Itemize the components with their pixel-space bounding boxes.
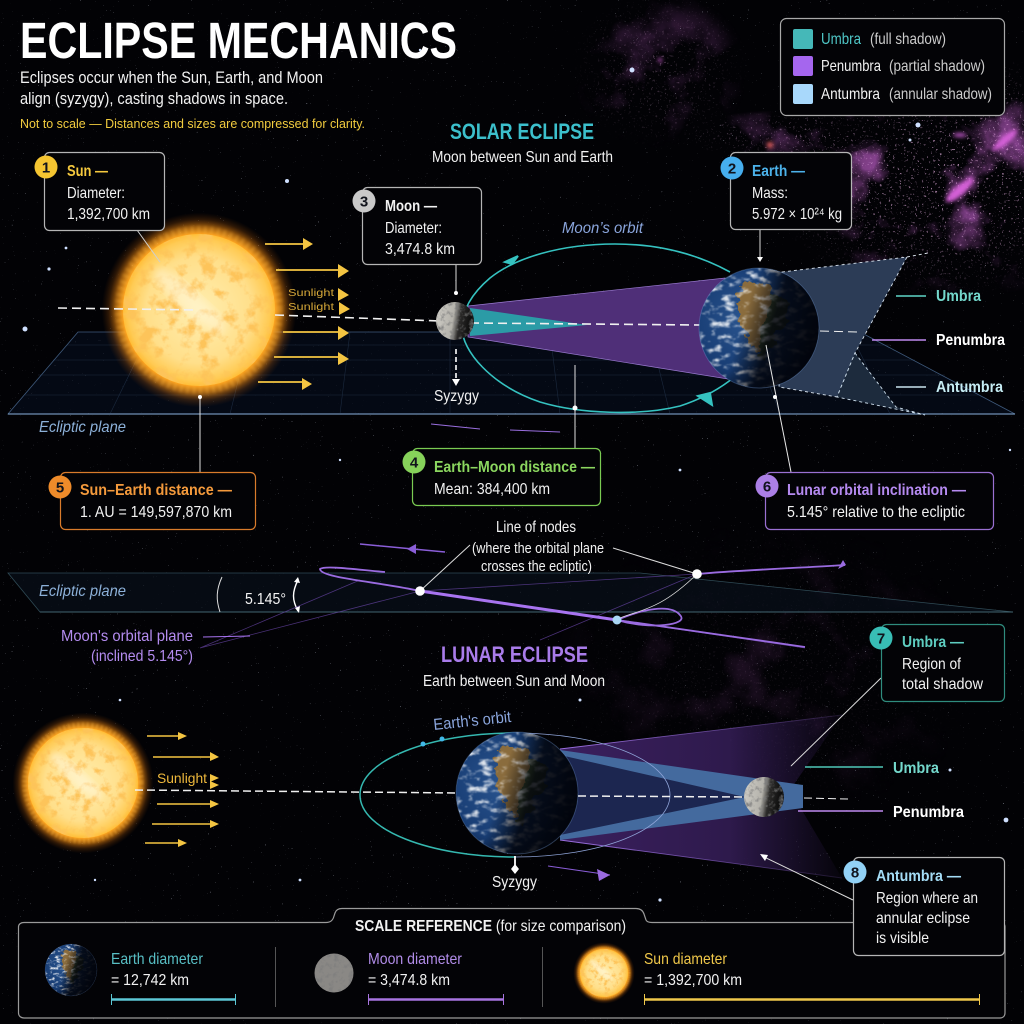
callout 1: sun: Diameter:	[67, 185, 125, 202]
callout 5: sun-earth distance: Sun–Earth distance —	[80, 482, 232, 499]
penumbra cone, solar diagram	[468, 278, 740, 381]
legend: Umbra	[821, 31, 861, 48]
callout 1: sun	[34, 152, 164, 262]
scale reference panel: = 12,742 km	[111, 972, 189, 989]
sunlight arrows, solar diagram: Sunlight	[288, 288, 334, 299]
callout 3: moon: 3,474.8 km	[385, 241, 455, 258]
ecliptic plane grid, solar diagram	[8, 332, 1015, 414]
syzygy marker, lunar diagram: Syzygy	[492, 874, 537, 891]
callout 8: antumbra: is visible	[876, 930, 929, 947]
callout 3: moon	[352, 188, 482, 295]
earth, solar diagram	[699, 268, 819, 388]
callout 2: earth: 2	[728, 160, 736, 178]
earth's orbit: Earth's orbit	[433, 709, 512, 734]
legend: (partial shadow)	[889, 58, 985, 75]
callout 1: sun: 1	[42, 160, 50, 176]
callout 3: moon: Moon —	[385, 198, 437, 215]
callout 6: lunar orbital inclination: 6	[763, 478, 771, 496]
scale reference panel: Sun diameter	[644, 951, 728, 968]
intro text: align (syzygy), casting shadows in space.	[20, 90, 288, 108]
shadow labels, lunar diagram: Umbra	[893, 760, 939, 777]
callout 7: umbra: 7	[877, 630, 885, 648]
shadow labels, solar diagram	[872, 288, 1005, 396]
callout 3: moon: 3	[360, 194, 368, 210]
heading: solar eclipse: Moon between Sun and Earth	[432, 149, 613, 166]
intro text	[20, 69, 365, 131]
earth, lunar diagram	[456, 732, 578, 854]
callout 8: antumbra	[760, 854, 1004, 956]
shadow labels, lunar diagram: Penumbra	[893, 804, 964, 821]
inclination diagram: 5.145°	[245, 591, 286, 608]
moon, solar diagram	[436, 302, 474, 340]
callout 5: sun-earth distance: 1. AU = 149,597,870 km	[80, 504, 232, 521]
center line, solar diagram	[58, 308, 858, 332]
callout 8: antumbra: Region where an	[876, 890, 978, 907]
callout 6: lunar orbital inclination: Lunar orbital inclination —	[787, 482, 966, 499]
callout 7: umbra: Region of	[902, 656, 961, 673]
sunlight arrows, lunar diagram	[145, 732, 219, 847]
callout 6: lunar orbital inclination	[756, 345, 994, 530]
inclination diagram	[8, 519, 1013, 665]
heading: lunar eclipse: Earth between Sun and Moon	[423, 673, 605, 690]
callout 8: antumbra: annular eclipse	[876, 910, 970, 927]
scale reference panel: SCALE REFERENCE (for size comparison)	[355, 918, 626, 935]
inclination diagram: Ecliptic plane	[39, 583, 126, 600]
umbra, lunar diagram	[560, 750, 803, 840]
moon, lunar diagram	[744, 777, 784, 817]
heading: solar eclipse: SOLAR ECLIPSE	[450, 119, 594, 144]
intro text: Eclipses occur when the Sun, Earth, and Moon	[20, 69, 323, 87]
callout 1: sun: Sun —	[67, 163, 108, 180]
intro text: Not to scale — Distances and sizes are compressed for clarity.	[20, 116, 365, 131]
syzygy marker, solar diagram: Syzygy	[434, 388, 479, 405]
legend: (annular shadow)	[889, 86, 992, 103]
scale reference panel: = 3,474.8 km	[368, 972, 450, 989]
callout 2: earth: Mass:	[752, 185, 788, 202]
earth's orbit	[360, 709, 670, 857]
syzygy marker, solar diagram	[434, 349, 479, 405]
sun, lunar diagram	[13, 713, 153, 853]
callout 2: earth: Earth —	[752, 163, 805, 180]
syzygy marker, lunar diagram	[492, 856, 610, 891]
scale reference panel: = 1,392,700 km	[644, 972, 742, 989]
callout 2: earth	[720, 152, 852, 262]
legend: Penumbra	[821, 58, 881, 75]
inclination diagram: crosses the ecliptic)	[481, 559, 592, 575]
shadow labels, lunar diagram	[798, 760, 964, 821]
moon's orbit	[462, 220, 768, 412]
shadow labels, solar diagram: Penumbra	[936, 332, 1005, 349]
callout 4: earth-moon distance: 4	[410, 454, 419, 472]
callout 5: sun-earth distance	[48, 395, 256, 530]
callout 1: sun: 1,392,700 km	[67, 206, 150, 223]
inclination diagram: Moon's orbital plane	[61, 628, 193, 645]
scale reference panel: Moon diameter	[368, 951, 463, 968]
callout 2: earth: 5.972 × 10²⁴ kg	[752, 206, 842, 223]
inclination diagram: (where the orbital plane	[472, 541, 604, 557]
sunlight arrows, solar diagram	[258, 238, 350, 390]
heading: solar eclipse	[432, 119, 613, 166]
sunlight arrows, lunar diagram: Sunlight	[157, 770, 207, 786]
callout 3: moon: Diameter:	[385, 220, 442, 237]
shadow beyond Earth	[779, 253, 928, 415]
legend: Antumbra	[821, 86, 880, 103]
callout 7: umbra: Umbra —	[902, 634, 964, 651]
callout 7: umbra: total shadow	[902, 676, 983, 693]
callout 4: earth-moon distance	[402, 365, 600, 506]
moon's orbit: Moon’s orbit	[562, 220, 644, 237]
callout 8: antumbra: Antumbra —	[876, 868, 961, 885]
sunlight arrows, solar diagram: Sunlight	[288, 302, 334, 313]
heading: lunar eclipse: LUNAR ECLIPSE	[441, 642, 588, 667]
shadow labels, solar diagram: Umbra	[936, 288, 981, 305]
legend: (full shadow)	[870, 31, 946, 48]
scale reference panel: Earth diameter	[111, 951, 204, 968]
center line, lunar diagram	[135, 790, 848, 799]
umbra cone, solar diagram	[470, 308, 587, 336]
scale reference panel	[18, 908, 1005, 1018]
inclination diagram: Line of nodes	[496, 519, 576, 536]
sun, solar diagram	[102, 213, 296, 407]
shadow labels, solar diagram: Antumbra	[936, 379, 1003, 396]
callout 6: lunar orbital inclination: 5.145° relative to the ecliptic	[787, 504, 965, 521]
inclination diagram: (inclined 5.145°)	[91, 648, 193, 665]
callout 4: earth-moon distance: Earth–Moon distance —	[434, 459, 595, 476]
callout 7: umbra	[791, 624, 1004, 766]
legend	[780, 18, 1004, 116]
callout 5: sun-earth distance: 5	[56, 480, 64, 496]
callout 4: earth-moon distance: Mean: 384,400 km	[434, 481, 550, 498]
callout 8: antumbra: 8	[851, 864, 859, 882]
heading: lunar eclipse	[423, 642, 605, 690]
penumbra, lunar diagram	[560, 715, 842, 878]
ecliptic plane label: Ecliptic plane	[39, 419, 126, 436]
title: ECLIPSE MECHANICS	[20, 12, 457, 69]
